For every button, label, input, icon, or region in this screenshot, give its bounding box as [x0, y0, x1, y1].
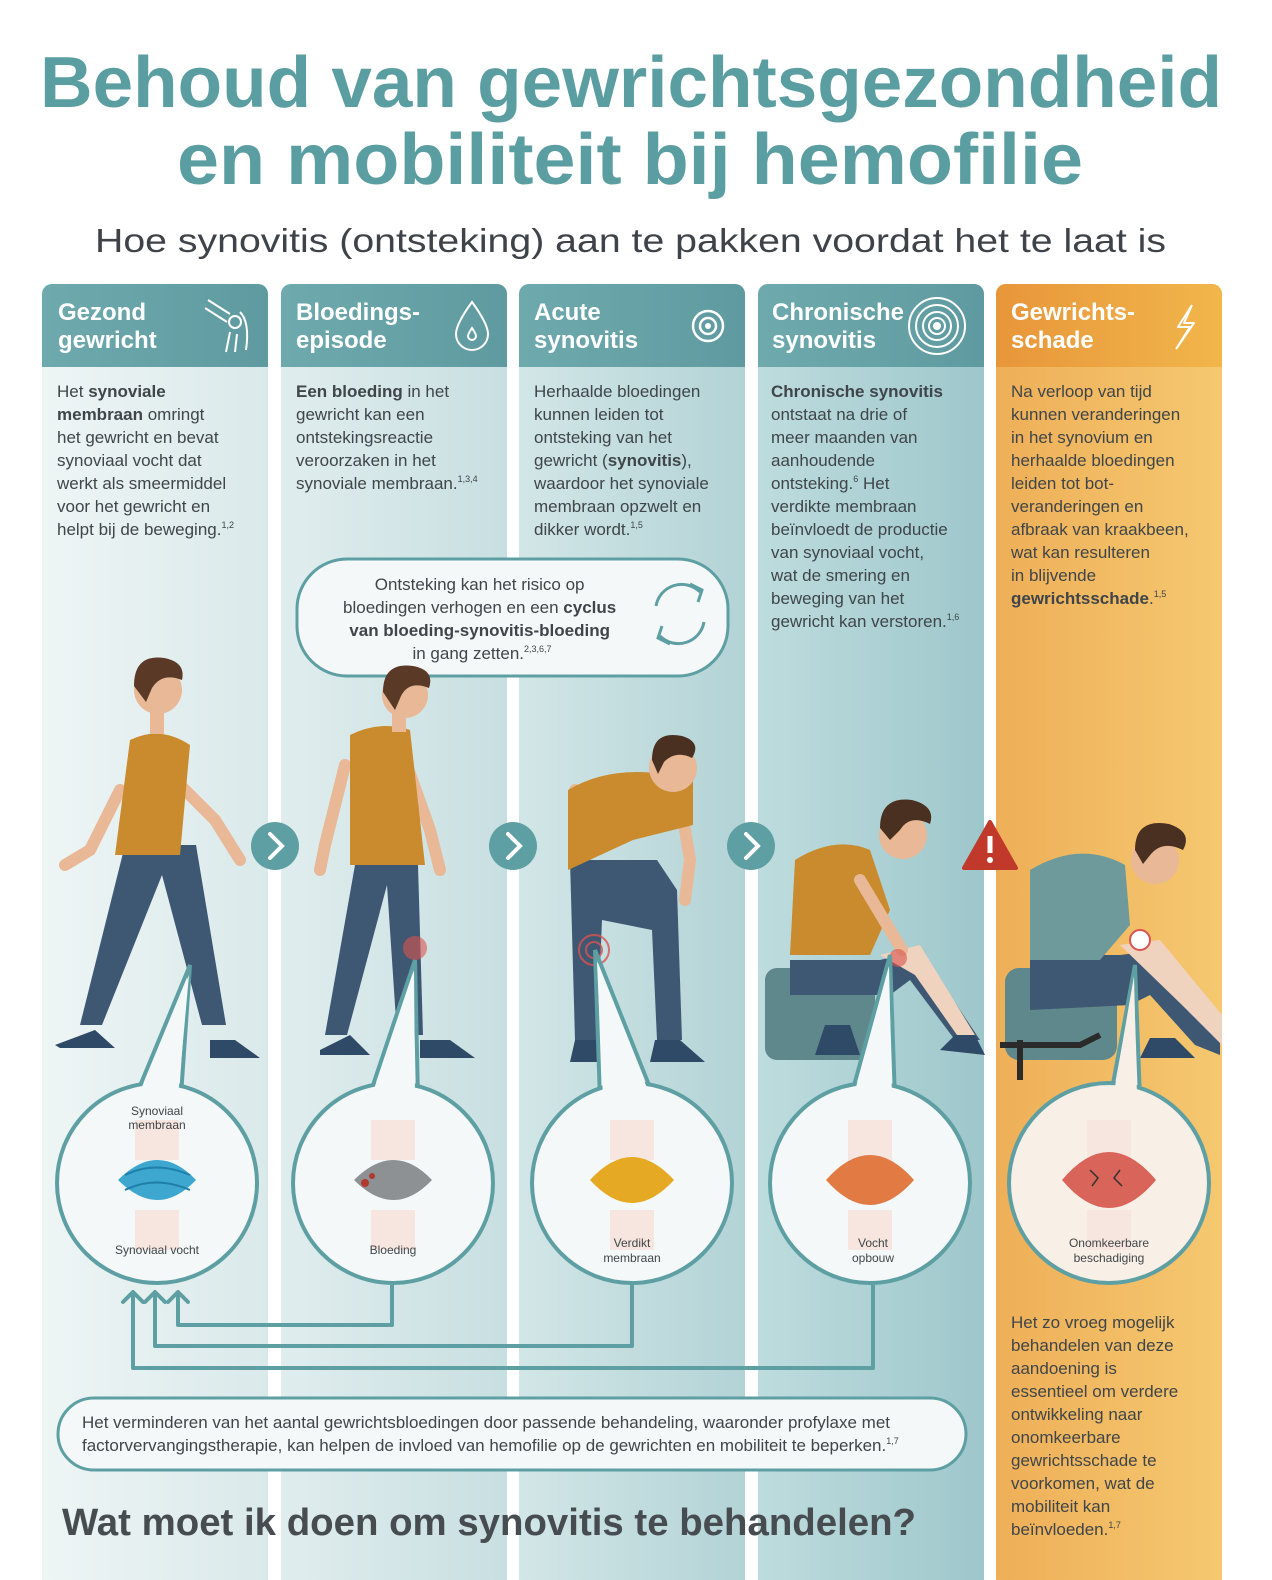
text block: col1: helpt bij de beweging. — [57, 520, 234, 539]
bubble: irreversible damage — [1009, 965, 1209, 1283]
text block: col5 bottom: 1,7 — [1108, 1520, 1121, 1530]
text block: col2: 1,3,4 — [458, 474, 478, 484]
title: en mobiliteit bij hemofilie — [177, 120, 1083, 200]
figure: sitting man — [765, 800, 985, 1060]
text block: col3: 1,5 — [630, 520, 643, 530]
header: Gezond gewricht: Gezond — [58, 299, 146, 326]
header: Acute synovitis — [519, 284, 745, 367]
text block: col5 bottom: onomkeerbare — [1011, 1428, 1121, 1447]
text block: col5: herhaalde bloedingen — [1011, 451, 1175, 470]
text block: col5 bottom: essentieel om verdere — [1011, 1382, 1178, 1401]
callout: treatment: 1,7 — [886, 1436, 899, 1446]
text block: col4: Het — [858, 474, 890, 493]
callout: cycle: Ontsteking kan het risico op — [375, 575, 585, 594]
panel: column backgrounds — [42, 284, 1222, 1580]
text block: col2: gewricht kan een — [296, 405, 425, 424]
text block: col4: beweging van het — [771, 589, 905, 608]
callout: treatment — [58, 1398, 966, 1470]
bubble: irreversible damage: Onomkeerbare — [1069, 1236, 1149, 1250]
icon: warning — [964, 822, 1016, 868]
bubble: fluid buildup — [770, 955, 970, 1283]
text block: col3: waardoor het synoviale — [533, 474, 709, 493]
text block: col1: Het synoviale — [57, 382, 166, 401]
connector arrows — [123, 1285, 873, 1368]
callout: treatment: factorvervangingstherapie, kan helpen de invloed van hemofilie op de gewrichten en mobiliteit te beperken. — [82, 1436, 899, 1455]
text block: col4: wat de smering en — [770, 566, 910, 585]
header: Gewrichtsschade — [996, 284, 1222, 367]
text block: col1: voor het gewricht en — [57, 497, 210, 516]
text block: col3: Herhaalde bloedingen — [534, 382, 700, 401]
text block: col5 bottom: aandoening is — [1011, 1359, 1117, 1378]
bubble: healthy joint: Synoviaal vocht — [115, 1243, 200, 1257]
text block: col4: beïnvloedt de productie — [771, 520, 948, 539]
header: Gezond gewricht — [42, 284, 268, 367]
text block: col4: 6 — [853, 474, 858, 484]
text block: col5: veranderingen en — [1011, 497, 1143, 516]
bubble: bleeding joint — [293, 960, 493, 1283]
callout: cycle: bloedingen verhogen en een cyclus — [343, 598, 616, 617]
text block: col3: membraan opzwelt en — [534, 497, 701, 516]
text block: col5: afbraak van kraakbeen, — [1011, 520, 1189, 539]
bubble: irreversible damage: beschadiging — [1074, 1251, 1144, 1265]
bubble: thickened membrane: Verdikt — [614, 1236, 651, 1250]
text block: col5: gewrichtsschade. — [1011, 589, 1154, 608]
callout: cycle — [297, 559, 728, 676]
text block: col4: aanhoudende — [771, 451, 875, 470]
subtitle: Hoe synovitis (ontsteking) aan te pakken voordat het te laat is — [95, 222, 1166, 259]
text block: col4: 1,6 — [947, 612, 959, 622]
callout: cycle: in gang zetten. — [412, 644, 552, 663]
icon: cycle arrows — [656, 584, 704, 644]
icon: rings — [909, 298, 965, 354]
callout: treatment: Het verminderen van het aantal gewrichtsbloedingen door passende behandeling, waaronder profylaxe met — [82, 1413, 890, 1432]
icon: lightning — [1176, 305, 1194, 349]
text block: col5: 1,5 — [1154, 589, 1166, 599]
text block: col5: kunnen veranderingen — [1011, 405, 1180, 424]
text block: col3: ontsteking van het — [534, 428, 672, 447]
text block: col4: meer maanden van — [771, 428, 917, 447]
header: Chronische synovitis: Chronische — [772, 299, 904, 326]
text block: col5: in het synovium en — [1011, 428, 1153, 447]
bubble: thickened membrane: membraan — [603, 1251, 661, 1265]
text block: col2: ontstekingsreactie — [296, 428, 433, 447]
text block: col4: gewricht kan verstoren. — [771, 612, 959, 631]
text block: col3: gewricht (synovitis), — [534, 451, 692, 470]
text block: col5 bottom: voorkomen, wat de — [1011, 1474, 1155, 1493]
text block: col4: verdikte membraan — [771, 497, 917, 516]
bubble: healthy joint: Synoviaal — [131, 1104, 183, 1118]
icon: chevron arrows — [251, 822, 775, 870]
text block: col5 bottom: gewrichtsschade te — [1011, 1451, 1157, 1470]
bubble: healthy joint — [57, 965, 257, 1283]
header: Gezond gewricht: gewricht — [58, 327, 157, 354]
text block: col4: van synoviaal vocht, — [771, 543, 924, 562]
text block: col1: 1,2 — [221, 520, 234, 530]
callout: cycle: 2,3,6,7 — [524, 644, 552, 654]
text block: col5 bottom: behandelen van deze — [1011, 1336, 1174, 1355]
header: Acute synovitis: synovitis — [534, 327, 638, 354]
header: Bloedings-episode: episode — [296, 327, 387, 354]
text block: col1: synoviaal vocht dat — [57, 451, 202, 470]
figure: walking man — [55, 658, 260, 1058]
figure: bending man — [568, 735, 705, 1062]
text block: col2: veroorzaken in het — [296, 451, 436, 470]
header: Bloedings-episode — [281, 284, 507, 367]
text block: col2: Een bloeding in het — [296, 382, 449, 401]
header: Gewrichtsschade: schade — [1011, 327, 1094, 354]
text block: col5: wat kan resulteren — [1010, 543, 1150, 562]
title — [40, 43, 1222, 200]
text block: col4: Chronische synovitis — [771, 382, 943, 401]
title: Behoud van gewrichtsgezondheid — [40, 43, 1222, 123]
text block: col5 bottom: mobiliteit kan — [1011, 1497, 1110, 1516]
text block: col5: Na verloop van tijd — [1011, 382, 1152, 401]
text block: col2: synoviale membraan. — [296, 474, 478, 493]
text block: col5 bottom: Het zo vroeg mogelijk — [1011, 1313, 1175, 1332]
text block: col1: membraan omringt — [57, 405, 204, 424]
icon: drop — [456, 302, 488, 350]
text block: col3: kunnen leiden tot — [534, 405, 664, 424]
text block: col1: het gewricht en bevat — [57, 428, 219, 447]
header: Acute synovitis: Acute — [534, 299, 601, 326]
text block: col5 bottom: ontwikkeling naar — [1011, 1405, 1143, 1424]
figure: man with damaged knee — [1000, 823, 1222, 1080]
text block: col5: leiden tot bot- — [1011, 474, 1114, 493]
header: Gewrichtsschade: Gewrichts- — [1011, 299, 1135, 326]
icon: target — [693, 311, 723, 341]
bubble: thickened membrane — [532, 950, 732, 1283]
text block: col5: in blijvende — [1011, 566, 1096, 585]
bubble: fluid buildup: opbouw — [852, 1251, 894, 1265]
header: Chronische synovitis: synovitis — [772, 327, 876, 354]
text block: col4: ontsteking. — [771, 474, 890, 493]
figure: man with bleeding knee — [320, 666, 475, 1058]
header: Bloedings-episode: Bloedings- — [296, 299, 420, 326]
bubble: bleeding joint: Bloeding — [370, 1243, 416, 1257]
text block: col5 bottom: beïnvloeden. — [1011, 1520, 1121, 1539]
heading: bottom question: Wat moet ik doen om synovitis te behandelen? — [62, 1502, 916, 1544]
header: Chronische synovitis — [758, 284, 984, 367]
callout: cycle: van bloeding-synovitis-bloeding — [349, 621, 610, 640]
text block: col3: dikker wordt. — [534, 520, 643, 539]
text block: col1: werkt als smeermiddel — [56, 474, 226, 493]
text block: col4: ontstaat na drie of — [771, 405, 907, 424]
icon: knee — [205, 300, 247, 352]
bubble: fluid buildup: Vocht — [858, 1236, 889, 1250]
bubble: healthy joint: membraan — [128, 1118, 186, 1132]
